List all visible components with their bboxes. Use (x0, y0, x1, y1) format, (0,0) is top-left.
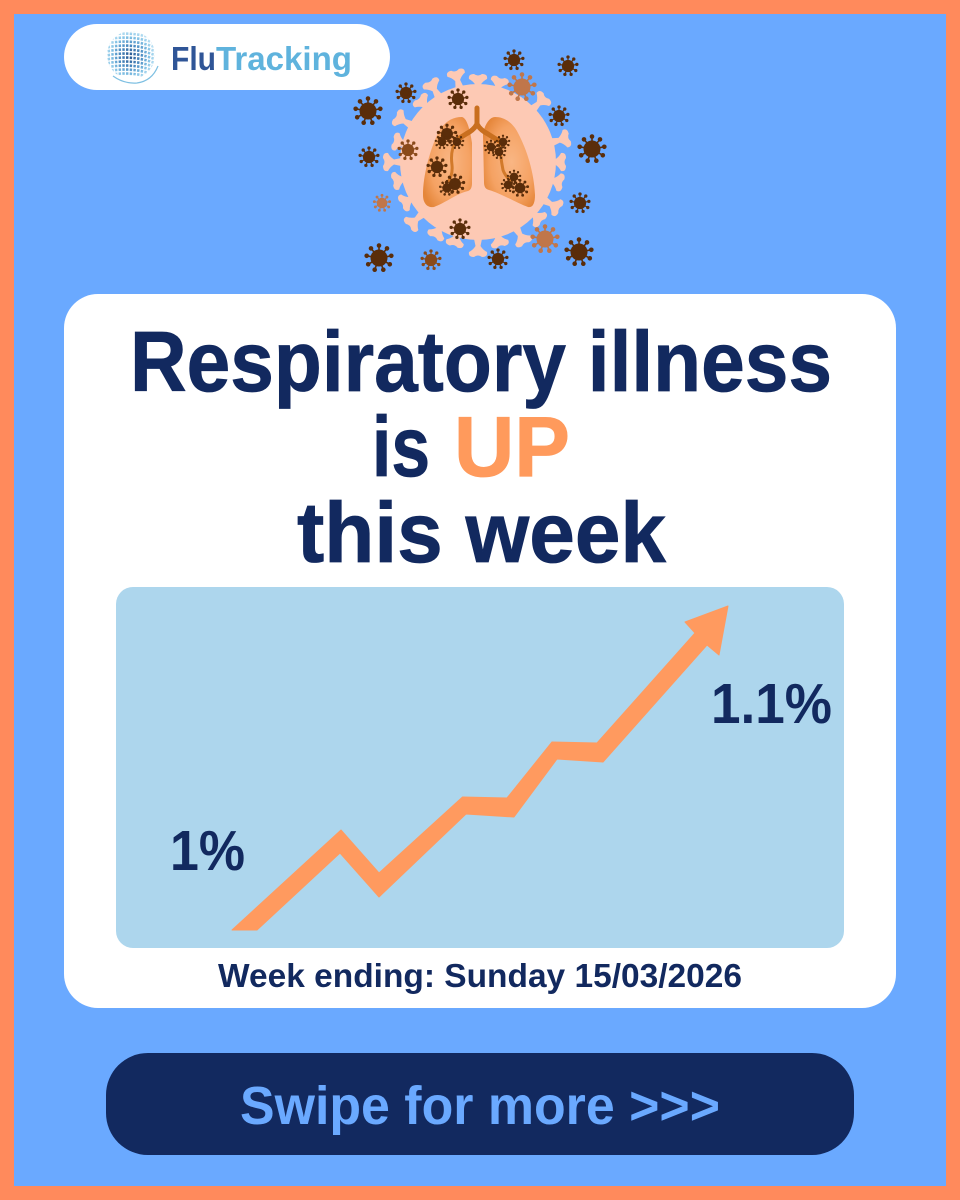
illustration: virus and lungs (353, 49, 607, 272)
title (130, 315, 832, 581)
title: Respiratory illness (130, 315, 832, 410)
label: start value: 1% (170, 819, 245, 883)
title: UP (454, 400, 570, 495)
date line: Week ending: Sunday 15/03/2026 (218, 957, 742, 994)
label: end value: 1.1% (711, 672, 832, 736)
virus spikes (383, 68, 572, 257)
icon: dotted globe (107, 31, 158, 84)
arrow: rising trend (232, 606, 728, 930)
virus body (400, 84, 556, 240)
panel: main card (64, 294, 896, 1008)
title: is (372, 400, 430, 495)
viruses (353, 49, 607, 272)
lungs (423, 108, 535, 207)
chart panel (116, 587, 844, 948)
title: this week (297, 486, 667, 581)
wordmark: Flu (171, 40, 216, 77)
logo pill: FluTracking: Tracking (216, 40, 352, 77)
button: swipe for more: Swipe for more >>> (240, 1076, 720, 1136)
logo pill: FluTracking (64, 24, 390, 90)
button: swipe for more (106, 1053, 854, 1155)
